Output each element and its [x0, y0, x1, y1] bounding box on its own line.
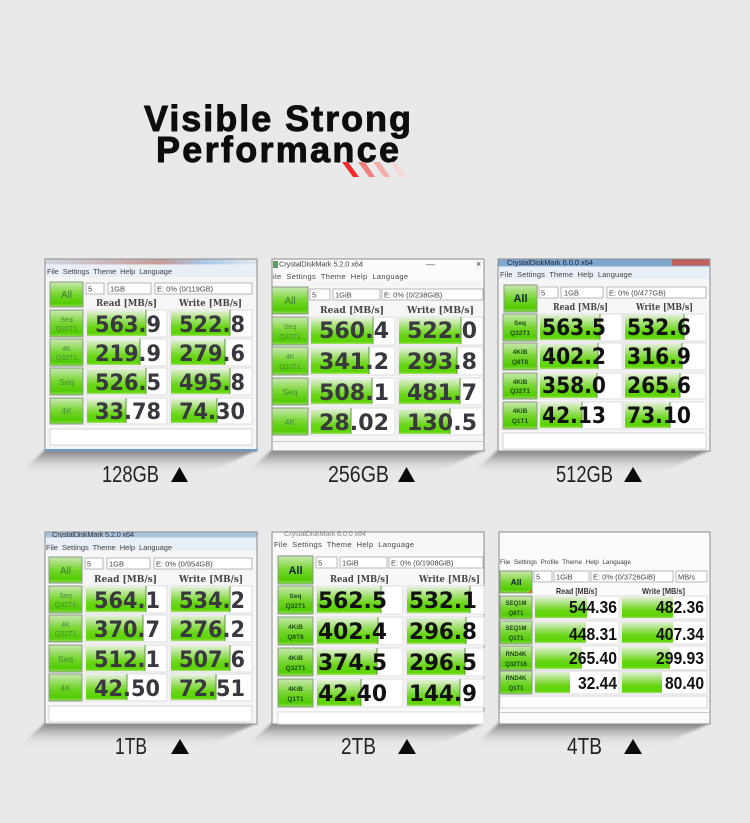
row: 4KiB Q1T1: Q1T1 — [512, 418, 529, 425]
row: 4KiB Q1T1: 73.10 — [627, 404, 691, 429]
All button — [49, 557, 82, 583]
row: SEQ1M Q1T1: 448.31 — [569, 624, 617, 644]
status box — [503, 433, 706, 449]
dropdowns: 5 — [88, 284, 92, 294]
row: Seq Q32T1: Seq — [284, 324, 296, 331]
row: Seq: Seq — [282, 387, 298, 397]
row: 4K Q32T1: Q32T1 — [56, 355, 77, 362]
status box — [50, 429, 252, 445]
row: Seq: 508.1 — [319, 381, 389, 406]
column headers: Write [MB/s] — [635, 303, 693, 313]
title: Visible Strong — [144, 98, 411, 139]
column headers: Read [MB/s] — [553, 303, 608, 313]
row: 4K: 4K — [61, 406, 72, 416]
row: 4K Q32T1 — [49, 615, 252, 643]
row: 4K: 130.5 — [407, 411, 477, 436]
row: Seq Q32T1: Seq — [59, 593, 72, 600]
row: 4K Q32T1: 4K — [61, 622, 70, 629]
column headers — [94, 575, 243, 585]
panel: 128GB benchmark — [45, 259, 257, 451]
All button — [504, 285, 537, 312]
label: 4TB — [567, 733, 642, 759]
row: Seq: 495.8 — [179, 371, 245, 396]
red slanted stripes accent — [342, 162, 406, 177]
title bar — [46, 530, 256, 551]
row: Seq Q32T1: Q32T1 — [55, 602, 76, 609]
row: 4KiB Q1T1: 4KiB — [288, 686, 303, 693]
menu bar: File Settings Theme Help Language — [47, 267, 172, 276]
All button: All — [284, 296, 296, 307]
row: 4K Q32T1: 341.2 — [319, 350, 389, 375]
status box — [278, 712, 484, 724]
row: 4K Q32T1: 276.2 — [179, 618, 245, 643]
row: Seq Q32T1: Seq — [60, 317, 73, 324]
row: SEQ1M Q8T1: 544.36 — [569, 597, 617, 617]
row: Seq — [272, 378, 483, 406]
row: Seq Q32T1: Q32T1 — [56, 326, 77, 333]
All button — [278, 556, 313, 584]
row: 4K Q32T1: Q32T1 — [279, 364, 301, 371]
dropdowns: 5 — [312, 290, 316, 300]
row: 4KiB Q8T8: 316.9 — [627, 345, 691, 370]
menu bar: File Settings Profile Theme Help Language — [500, 559, 631, 566]
column headers — [330, 575, 480, 585]
row: Seq Q32T1: Q32T1 — [286, 603, 306, 610]
row: 4KiB Q32T1: Q32T1 — [510, 388, 530, 395]
row: 4KiB Q8T8: Q8T8 — [287, 634, 304, 641]
row: SEQ1M Q1T1 — [500, 621, 707, 644]
row: 4K Q32T1: 4K — [62, 346, 71, 353]
row: RND4K Q1T1 — [500, 671, 707, 694]
row: RND4K Q1T1: Q1T1 — [508, 686, 524, 692]
row: RND4K Q1T1: 80.40 — [665, 673, 704, 693]
title bar: — — [426, 259, 435, 269]
column headers — [553, 303, 693, 313]
row: 4KiB Q8T8 — [503, 343, 706, 370]
row: 4K: 42.50 — [94, 677, 160, 702]
row: 4KiB Q1T1: Q1T1 — [287, 696, 304, 703]
row: 4KiB Q1T1: 42.40 — [318, 682, 387, 707]
row: 4K Q32T1: Q32T1 — [55, 631, 76, 638]
row: SEQ1M Q8T1 — [500, 596, 707, 619]
row: Seq: Seq — [59, 377, 74, 387]
row: Seq Q32T1: Seq — [514, 320, 526, 327]
title bar: CrystalDiskMark 6.0.0 x64 — [284, 529, 366, 538]
row: RND4K Q32T16: Q32T16 — [505, 662, 527, 668]
panel: 256GB benchmark — [272, 259, 484, 451]
title bar: CrystalDiskMark 5.2.0 x64 — [279, 260, 363, 268]
row: Seq Q32T1 — [278, 586, 484, 614]
menu bar: File Settings Theme Help Language — [500, 270, 632, 279]
row: 4KiB Q8T8: 4KiB — [513, 349, 528, 356]
row: SEQ1M Q8T1: SEQ1M — [505, 601, 527, 607]
dropdowns: 1GB — [110, 284, 125, 294]
row: RND4K Q32T16: 299.93 — [656, 648, 704, 668]
All button: All — [61, 290, 72, 301]
row: 4K: 33.78 — [95, 400, 161, 425]
row: Seq Q32T1: 534.2 — [179, 589, 245, 614]
row: 4KiB Q1T1: 42.13 — [542, 404, 606, 429]
title bar — [272, 259, 484, 280]
column headers: Write [MB/s] — [178, 299, 242, 309]
row: 4KiB Q8T8: 402.2 — [542, 345, 606, 370]
row: 4K — [49, 674, 252, 702]
row: 4KiB Q8T8: 296.8 — [409, 620, 477, 645]
row: Seq Q32T1: 532.6 — [627, 316, 691, 341]
panel: 1TB benchmark — [45, 530, 257, 724]
All button — [50, 282, 83, 307]
column headers — [96, 299, 242, 309]
column headers: Write [MB/s] — [418, 575, 480, 585]
row: 4K Q32T1 — [50, 339, 252, 367]
column headers: Read [MB/s] — [96, 299, 157, 309]
row: 4KiB Q1T1 — [278, 679, 484, 707]
row: SEQ1M Q8T1: Q8T1 — [508, 611, 524, 617]
row: 4KiB Q32T1: Q32T1 — [286, 665, 306, 672]
All button: All — [513, 293, 528, 305]
row: Seq Q32T1 — [50, 310, 252, 338]
row: SEQ1M Q8T1: 482.36 — [656, 597, 704, 617]
dropdowns — [539, 287, 706, 298]
row: 4KiB Q1T1: 4KiB — [513, 408, 528, 415]
row: Seq Q32T1 — [503, 314, 706, 341]
row: SEQ1M Q1T1: 407.34 — [656, 624, 704, 644]
row: Seq Q32T1: 564.1 — [94, 589, 160, 614]
row: Seq: 507.6 — [179, 648, 245, 673]
row: RND4K Q32T16 — [500, 646, 707, 670]
row: Seq Q32T1: Q32T1 — [510, 330, 530, 337]
title bar: CrystalDiskMark 5.2.0 x64 — [52, 530, 134, 539]
row: Seq Q32T1: 522.0 — [407, 319, 477, 344]
row: 4KiB Q32T1 — [278, 648, 484, 676]
dropdowns: 5 — [541, 288, 545, 298]
row: 4K: 28.02 — [319, 411, 389, 436]
dropdowns: 5 — [536, 572, 540, 582]
dropdowns: 1GiB — [342, 558, 359, 568]
All button — [272, 287, 308, 314]
row: 4K Q32T1: 4K — [286, 354, 295, 361]
column headers: Read [MB/s] — [94, 575, 157, 585]
row: 4KiB Q32T1: 4KiB — [513, 379, 528, 386]
row: Seq Q32T1 — [49, 586, 252, 614]
row: 4K: 72.51 — [179, 677, 245, 702]
row: 4K Q32T1 — [272, 347, 483, 375]
title — [144, 98, 411, 170]
row: RND4K Q32T16: RND4K — [506, 652, 527, 658]
All button: All — [60, 566, 71, 577]
row: RND4K Q1T1: 32.44 — [578, 673, 617, 693]
row: 4KiB Q8T8: 402.4 — [318, 620, 387, 645]
column headers: Read [MB/s] — [556, 586, 597, 596]
label: 1TB: 1TB — [115, 733, 147, 759]
row: Seq Q32T1: Q32T1 — [279, 334, 301, 341]
dropdowns: 5 — [87, 560, 91, 568]
row: Seq Q32T1: 562.5 — [318, 589, 387, 614]
label: 1TB — [115, 733, 189, 759]
row: Seq: Seq — [58, 654, 73, 664]
dropdowns — [534, 571, 707, 582]
dropdowns: E: 0% (0/3726GiB) — [593, 572, 656, 582]
row: RND4K Q1T1: RND4K — [506, 676, 527, 682]
dropdowns: E: 0% (0/119GB) — [157, 284, 214, 294]
row: 4KiB Q1T1 — [503, 402, 706, 429]
column headers: Read [MB/s] — [330, 575, 389, 585]
column headers — [320, 306, 474, 316]
row: 4K: 74.30 — [179, 400, 245, 425]
label: 4TB: 4TB — [567, 733, 602, 759]
dropdowns: E: 0% (0/238GiB) — [384, 290, 443, 300]
row: 4K Q32T1: 370.7 — [94, 618, 160, 643]
label: 128GB: 128GB — [102, 461, 159, 487]
menu bar: File Settings Theme Help Language — [274, 540, 414, 549]
title bar — [498, 258, 710, 279]
label: 2TB: 2TB — [341, 733, 376, 759]
row: Seq Q32T1 — [272, 317, 483, 345]
dropdowns: 1GB — [109, 560, 124, 568]
row: 4K: 4K — [60, 683, 71, 693]
row: 4KiB Q32T1: 358.0 — [542, 374, 606, 399]
row: Seq Q32T1: 563.9 — [95, 313, 161, 338]
row: Seq: 526.5 — [95, 371, 161, 396]
row: 4K — [272, 408, 483, 436]
title: Performance — [156, 129, 399, 170]
row: SEQ1M Q1T1: Q1T1 — [508, 636, 524, 642]
title bar: CrystalDiskMark 6.0.0 x64 — [507, 258, 593, 267]
row: 4K Q32T1: 279.6 — [179, 342, 245, 367]
menu bar: File Settings Theme Help Language — [46, 543, 172, 552]
row: 4KiB Q8T8 — [278, 617, 484, 645]
row: RND4K Q32T16: 265.40 — [569, 648, 617, 668]
row: 4KiB Q1T1: 144.9 — [409, 682, 477, 707]
row: 4K: 4K — [285, 417, 296, 427]
label: 512GB: 512GB — [556, 461, 613, 487]
dropdowns: 5 — [318, 558, 322, 568]
status line — [273, 441, 483, 442]
row: Seq — [49, 645, 252, 673]
row: Seq Q32T1: 563.5 — [542, 316, 606, 341]
row: Seq Q32T1: 522.8 — [179, 313, 245, 338]
row: 4K Q32T1: 219.9 — [95, 342, 161, 367]
row: 4KiB Q32T1: 265.6 — [627, 374, 691, 399]
row: Seq: 481.7 — [407, 381, 477, 406]
All button: All — [288, 565, 303, 577]
row: 4KiB Q32T1 — [503, 373, 706, 399]
column headers — [556, 586, 685, 596]
dropdowns: E: 0% (0/1908GiB) — [391, 558, 454, 568]
row: Seq Q32T1: Seq — [290, 593, 301, 600]
dropdowns: 1GiB — [556, 572, 573, 582]
dropdowns: 1GB — [564, 288, 579, 298]
row: Seq — [50, 368, 252, 396]
panel: 2TB benchmark — [272, 529, 484, 724]
row: 4KiB Q8T8: Q8T8 — [512, 359, 529, 366]
row: SEQ1M Q1T1: SEQ1M — [505, 626, 527, 632]
label: 2TB — [341, 733, 416, 759]
row: 4KiB Q32T1: 374.5 — [318, 651, 387, 676]
row: 4KiB Q32T1: 296.5 — [409, 651, 477, 676]
panel shadows — [18, 450, 710, 747]
row: 4KiB Q8T8: 4KiB — [288, 624, 303, 631]
row: Seq Q32T1: 560.4 — [319, 319, 389, 344]
dropdowns: E: 0% (0/954GB) — [156, 560, 213, 568]
row: 4K — [50, 398, 252, 425]
panel: 512GB benchmark — [498, 258, 710, 451]
panel: 4TB benchmark — [499, 532, 710, 724]
status box — [500, 696, 707, 708]
column headers: Write [MB/s] — [178, 575, 243, 585]
column headers: Write [MB/s] — [406, 306, 474, 316]
All button — [500, 571, 532, 593]
label: 256GB: 256GB — [328, 461, 389, 487]
dropdowns — [85, 558, 252, 569]
dropdowns — [310, 289, 483, 300]
row: 4K Q32T1: 293.8 — [407, 350, 477, 375]
dropdowns — [316, 557, 483, 568]
dropdowns: 1GiB — [335, 290, 352, 300]
dropdowns — [86, 283, 252, 294]
row: 4KiB Q32T1: 4KiB — [288, 655, 303, 662]
All button: All — [511, 577, 521, 587]
menu bar: ile Settings Theme Help Language — [273, 272, 408, 281]
status box — [49, 706, 252, 722]
column headers: Write [MB/s] — [642, 586, 685, 596]
row: Seq Q32T1: 532.1 — [409, 589, 477, 614]
row: Seq: 512.1 — [94, 648, 160, 673]
dropdowns: MB/s — [678, 572, 695, 582]
title bar: × — [476, 259, 481, 269]
column headers: Read [MB/s] — [320, 306, 384, 316]
dropdowns: E: 0% (0/477GB) — [609, 288, 666, 298]
